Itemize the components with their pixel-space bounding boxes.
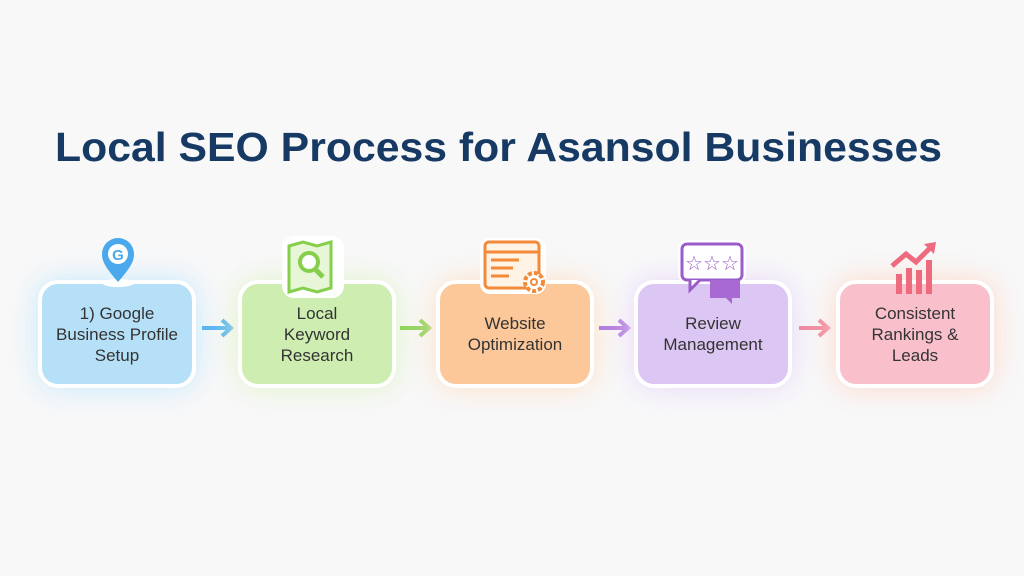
icon: browser gear	[480, 240, 546, 294]
icon: growth chart	[890, 242, 936, 294]
step 1 box: 1) Google	[80, 304, 154, 322]
step 4 box	[634, 280, 792, 388]
arrow 1	[202, 318, 234, 338]
arrow 4	[799, 318, 831, 338]
step 2 box	[238, 280, 396, 388]
arrow 2	[400, 318, 432, 338]
step 5 box: Consistent	[875, 304, 955, 322]
arrow 3	[599, 318, 631, 338]
step 4 box: Review	[685, 314, 741, 333]
title: Local SEO Process for Asansol Businesses	[55, 124, 942, 170]
step 1 box	[38, 280, 196, 388]
step 4 box: Management	[663, 335, 763, 354]
step 2 box: Research	[281, 346, 353, 364]
step 3 box: Website	[484, 314, 546, 333]
icon: review bubbles	[678, 242, 746, 304]
step 3 box: Optimization	[468, 335, 562, 354]
step 5 box	[836, 280, 994, 388]
icon: review bubbles: ☆☆☆	[685, 253, 739, 275]
icon: google pin: G	[112, 247, 124, 264]
icon: map search	[282, 240, 344, 298]
step 5 box: Leads	[892, 346, 938, 364]
icon: google pin	[102, 238, 134, 287]
step 2 box: Local	[297, 304, 337, 322]
step 2 box: Keyword	[284, 324, 350, 344]
step 5 box: Rankings &	[872, 324, 958, 344]
step 3 box	[436, 280, 594, 388]
step 1 box: Business Profile	[56, 324, 178, 344]
step 1 box: Setup	[95, 346, 139, 364]
